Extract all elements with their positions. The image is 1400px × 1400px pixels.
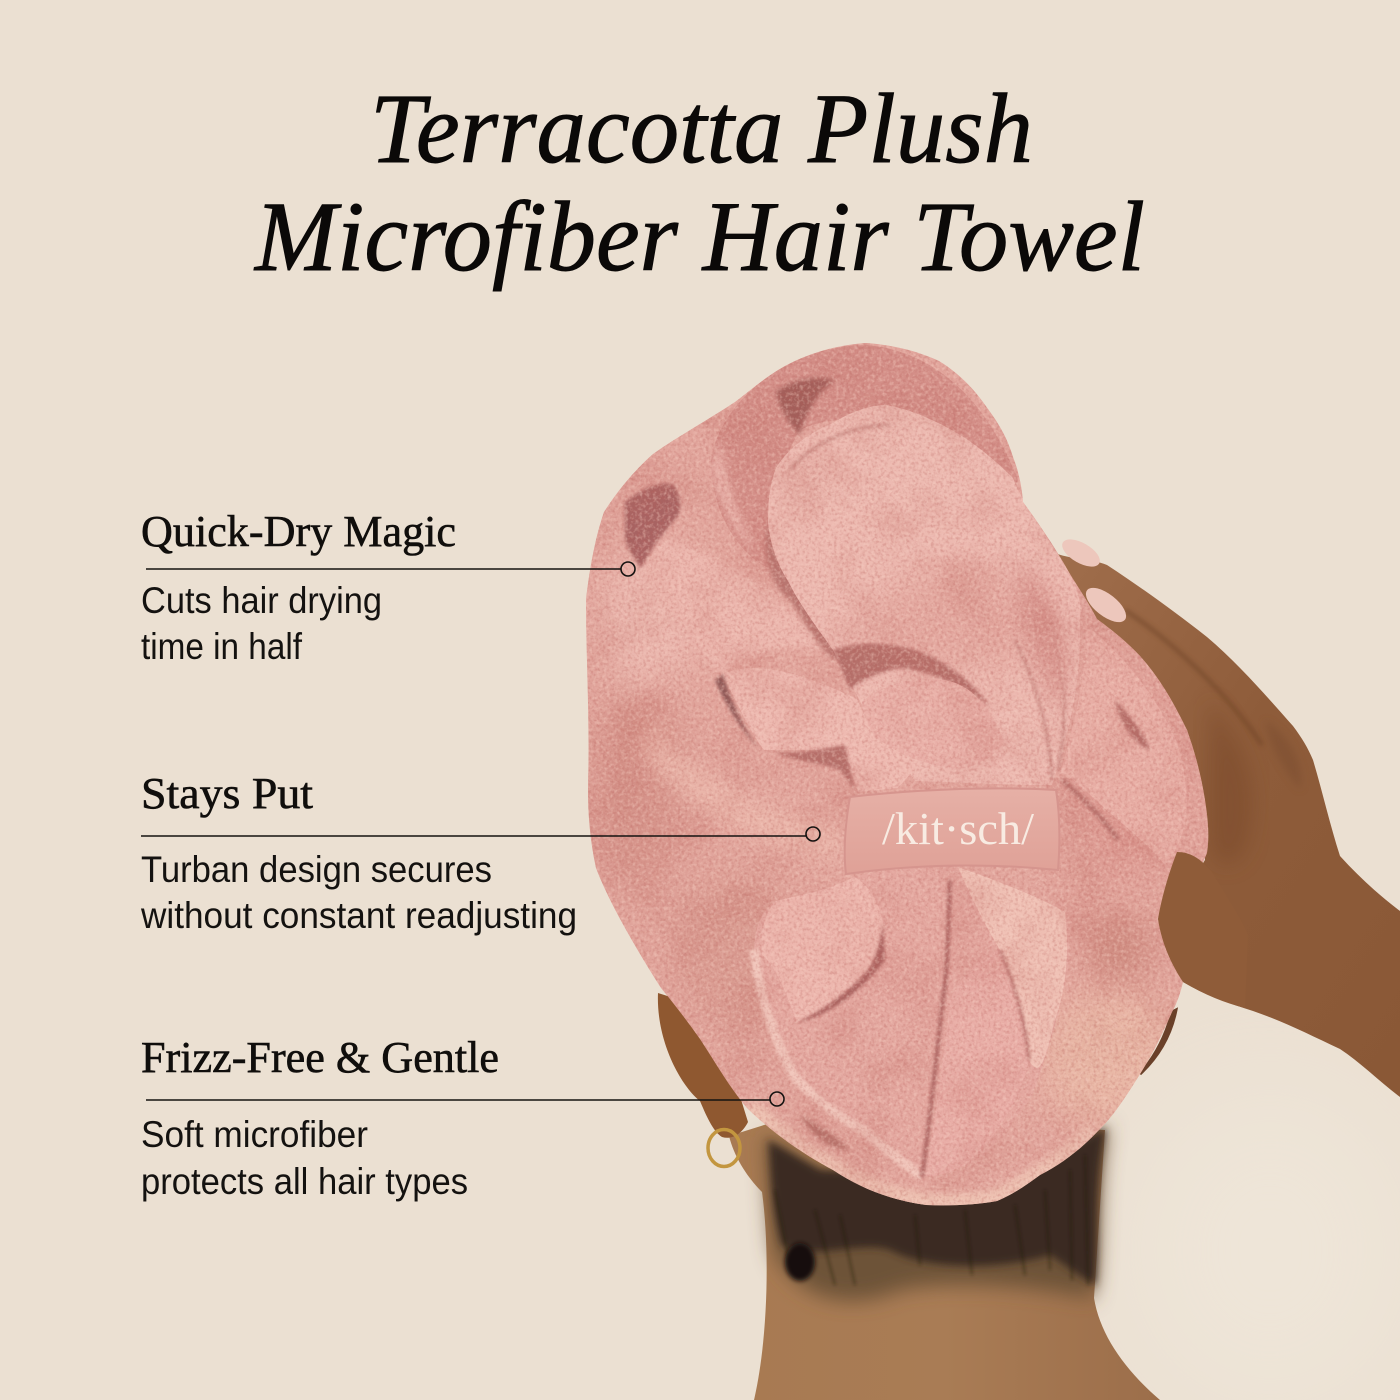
rear top roll	[711, 345, 1018, 585]
tail inner leaf	[932, 1174, 942, 1176]
hand and arm	[1053, 552, 1400, 1097]
lower knot edge	[754, 950, 922, 1177]
earring	[708, 1130, 740, 1166]
fur dark fleck	[570, 330, 1230, 1220]
main knot roll	[768, 405, 1081, 785]
loop shadow edge	[715, 674, 758, 748]
thumb	[1158, 852, 1248, 1008]
nape hair	[764, 1125, 1108, 1301]
lower brown patches	[800, 1115, 850, 1150]
feature: stays put	[140, 769, 820, 936]
top roll inner shadow	[776, 378, 835, 435]
feature: frizz-free and gentle: protects all hair types	[141, 1161, 468, 1202]
tail crease	[1000, 950, 1029, 1060]
tonal patches	[595, 680, 685, 900]
folded lobe	[862, 679, 1004, 768]
fingernail two	[1080, 582, 1132, 628]
feature: stays put: without constant readjusting	[140, 895, 577, 936]
far ear sliver	[1140, 1010, 1176, 1074]
mottled tone	[589, 344, 1192, 1196]
towel	[570, 330, 1230, 1220]
left highlight fold	[652, 538, 821, 672]
small lobe shadow	[797, 922, 885, 1022]
feature: frizz-free and gentle: Frizz-Free & Gentle	[141, 1033, 499, 1082]
knot cast shadow	[765, 526, 836, 660]
brand tag	[845, 788, 1059, 874]
feature: quick-dry magic	[141, 507, 635, 667]
right lower crease	[1062, 780, 1118, 840]
right tail flap	[958, 867, 1067, 1068]
lobe crease	[833, 644, 990, 706]
knot pleats	[790, 425, 1064, 780]
feature: stays put: Turban design secures	[141, 849, 492, 890]
loop underside shadow	[775, 745, 855, 790]
title: Terracotta Plush	[370, 73, 1033, 184]
secondary roll	[711, 446, 756, 551]
brand tag: /kit·sch/	[882, 803, 1034, 854]
title: Microfiber Hair Towel	[253, 181, 1145, 292]
left dark notch	[625, 484, 680, 568]
right roll crease	[1115, 700, 1150, 750]
center crease	[922, 880, 950, 1177]
feature: frizz-free and gentle	[141, 1033, 784, 1202]
fur light fleck	[570, 330, 1230, 1220]
feature: frizz-free and gentle: Soft microfiber	[141, 1114, 368, 1155]
lower knot	[754, 904, 787, 1010]
fingernail one	[1058, 534, 1104, 572]
small lobe	[762, 877, 883, 1022]
bottom edge band	[747, 1108, 1097, 1205]
title	[253, 73, 1145, 292]
inner fold loop	[723, 668, 919, 792]
knot lower shade	[877, 571, 1022, 672]
feature: quick-dry magic: Quick-Dry Magic	[141, 507, 456, 556]
neck and nape	[729, 1120, 1160, 1400]
feature: stays put: Stays Put	[141, 769, 313, 818]
diagonal light band left	[640, 720, 840, 860]
right side roll	[1060, 625, 1187, 865]
feature: quick-dry magic: Cuts hair drying	[141, 580, 382, 621]
photo: person wearing towel	[570, 330, 1400, 1400]
ear	[658, 993, 748, 1138]
feature: quick-dry magic: time in half	[141, 626, 303, 667]
knot soft shade	[1017, 560, 1066, 720]
